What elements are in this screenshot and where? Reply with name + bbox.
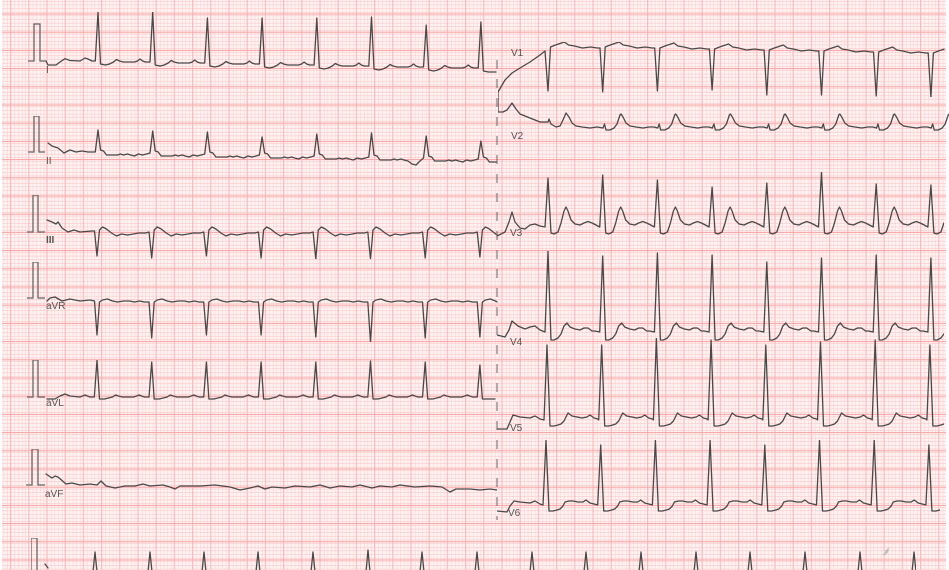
lead II — [28, 116, 496, 167]
lead V4 — [497, 251, 944, 348]
lead aVF — [26, 449, 497, 500]
lead V2 — [498, 90, 949, 142]
lead aVR: aVR — [46, 301, 65, 312]
lead V3 — [497, 172, 944, 239]
separator dashes — [496, 60, 498, 520]
lead III — [27, 195, 497, 259]
lead aVL: aVL — [46, 398, 64, 409]
lead II: II — [46, 156, 52, 167]
lead I: I — [46, 65, 49, 76]
lead III: III — [46, 235, 55, 246]
lead V6: V6 — [508, 508, 521, 519]
lead V5: V5 — [510, 423, 523, 434]
paper smudge — [882, 548, 889, 555]
lead aVL — [27, 360, 495, 409]
lead V1: V1 — [511, 48, 524, 59]
lead V1 — [498, 42, 944, 97]
lead V2: V2 — [511, 131, 524, 142]
lead aVR — [27, 262, 497, 342]
lead V5 — [497, 338, 944, 434]
lead V4: V4 — [510, 337, 523, 348]
lead aVF: aVF — [45, 489, 63, 500]
lead V6 — [497, 440, 940, 519]
lead V3: V3 — [510, 228, 523, 239]
rhythm strip — [31, 538, 916, 570]
lead I — [28, 12, 496, 76]
